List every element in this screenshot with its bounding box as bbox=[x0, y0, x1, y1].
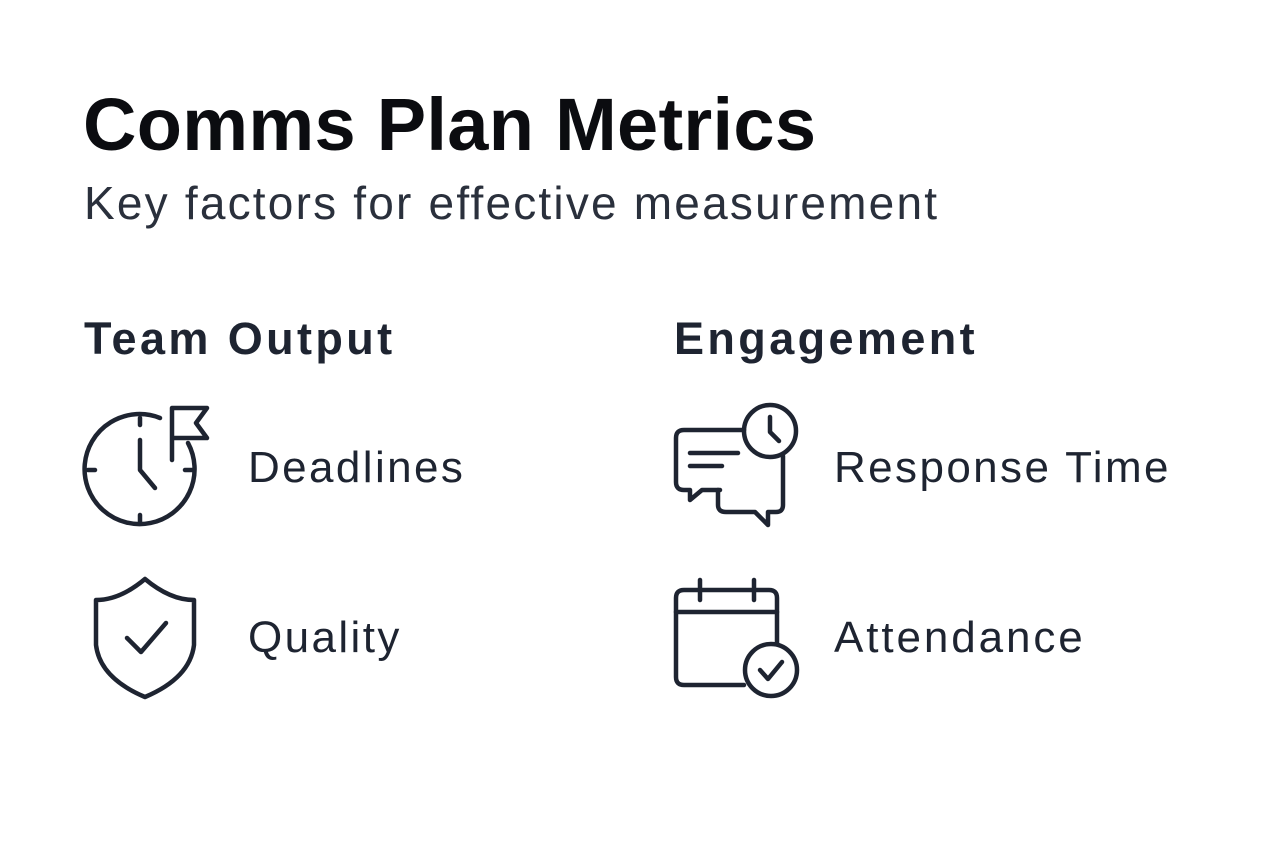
heading: team output: Team Output bbox=[84, 313, 396, 364]
title: Comms Plan Metrics bbox=[83, 83, 816, 166]
icon: shield bbox=[96, 579, 194, 697]
heading: engagement: Engagement bbox=[674, 313, 978, 364]
icon: calendar with check bbox=[676, 580, 797, 696]
label: attendance: Attendance bbox=[834, 613, 1086, 662]
subtitle: Key factors for effective measurement bbox=[84, 177, 939, 229]
label: response time: Response Time bbox=[834, 443, 1171, 492]
label: deadlines: Deadlines bbox=[248, 443, 465, 492]
icon: clock with flag bbox=[85, 408, 207, 524]
icon: chat bubbles with clock bbox=[676, 405, 796, 525]
label: quality: Quality bbox=[248, 613, 402, 662]
